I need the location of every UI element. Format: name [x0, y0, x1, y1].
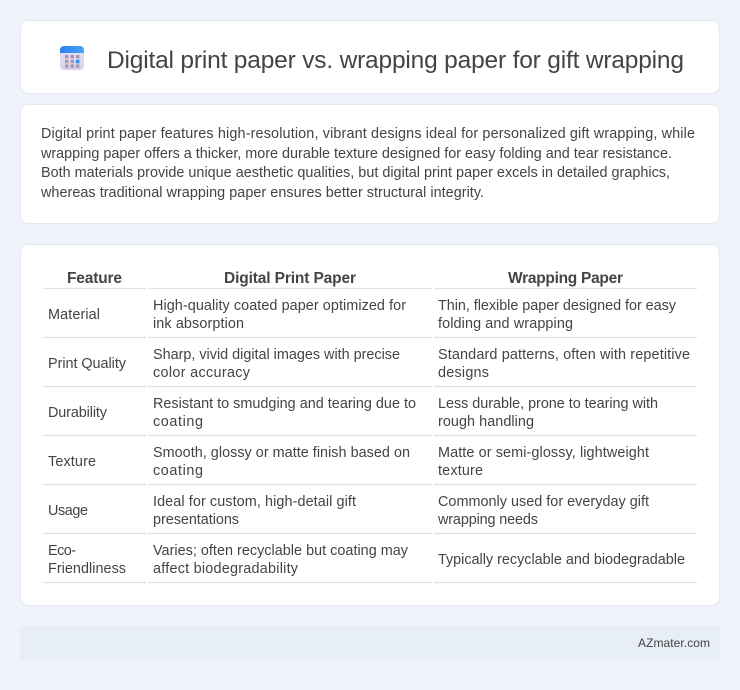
row: Eco-Friendliness: Eco- [48, 543, 76, 559]
row: Print Quality: Print Quality [48, 356, 127, 372]
table header [43, 270, 697, 288]
row: Print Quality: designs [438, 365, 489, 381]
row: Texture: Matte or semi-glossy, lightweight [438, 445, 649, 461]
row: Print Quality: Standard patterns, often with repetitive [438, 347, 690, 363]
row: Usage: Ideal for custom, high-detail gift [153, 494, 356, 510]
title: Digital print paper vs. wrapping paper for gift wrapping [107, 47, 684, 74]
row: Durability: Resistant to smudging and tearing due to [153, 396, 416, 412]
row: Usage: wrapping needs [437, 512, 538, 528]
row: Material: folding and wrapping [438, 316, 573, 332]
icon: calendar [60, 46, 84, 70]
row: Print Quality [43, 347, 697, 386]
row: Texture: coating [153, 463, 203, 479]
row: Eco-Friendliness [43, 543, 697, 582]
row: Material: High-quality coated paper optimized for [153, 298, 406, 314]
row: Eco-Friendliness: Varies; often recyclable but coating may [153, 543, 409, 559]
row: Durability [43, 396, 697, 436]
row: Material: Material [48, 307, 100, 323]
row: Texture: Smooth, glossy or matte finish based on [153, 445, 410, 461]
table header: Wrapping Paper [508, 270, 623, 287]
row: Material [43, 298, 697, 338]
footer bar [20, 626, 720, 660]
intro panel [20, 104, 720, 224]
row: Texture [43, 445, 697, 484]
row: Material: Thin, flexible paper designed for easy [438, 298, 677, 314]
row: Usage [43, 494, 697, 534]
row: Eco-Friendliness: Typically recyclable and biodegradable [438, 552, 685, 568]
row: Durability: Less durable, prone to tearing with [438, 396, 658, 412]
table header: Digital Print Paper [224, 270, 356, 287]
row: Texture: Texture [48, 454, 96, 470]
row: Usage: Usage [48, 503, 88, 519]
row: Durability: Durability [48, 405, 108, 421]
comparison table panel [20, 244, 720, 606]
row: Print Quality: Sharp, vivid digital images with precise [153, 347, 400, 363]
row: Eco-Friendliness: Friendliness [48, 561, 126, 577]
intro text [40, 126, 695, 201]
intro text: Digital print paper features high-resolution, vibrant designs ideal for personalized gift wrapping, while [41, 126, 695, 142]
row: Material: ink absorption [153, 316, 244, 332]
row: Eco-Friendliness: affect biodegradability [153, 561, 299, 577]
intro text: whereas traditional wrapping paper ensures better structural integrity. [40, 185, 484, 201]
row: Durability: coating [153, 414, 203, 430]
footer credit: AZmater.com [638, 636, 710, 650]
row: Print Quality: color accuracy [153, 365, 251, 381]
intro text: wrapping paper offers a thicker, more durable texture designed for easy folding and tear resistance. [40, 146, 672, 162]
intro text: Both materials provide unique aesthetic qualities, but digital print paper excels in detailed graphics, [41, 165, 670, 181]
row: Usage: presentations [153, 512, 239, 528]
row: Texture: texture [438, 463, 483, 479]
row: Durability: rough handling [438, 414, 534, 430]
row: Usage: Commonly used for everyday gift [438, 494, 649, 510]
table header: Feature [67, 270, 122, 287]
header panel [20, 20, 720, 94]
